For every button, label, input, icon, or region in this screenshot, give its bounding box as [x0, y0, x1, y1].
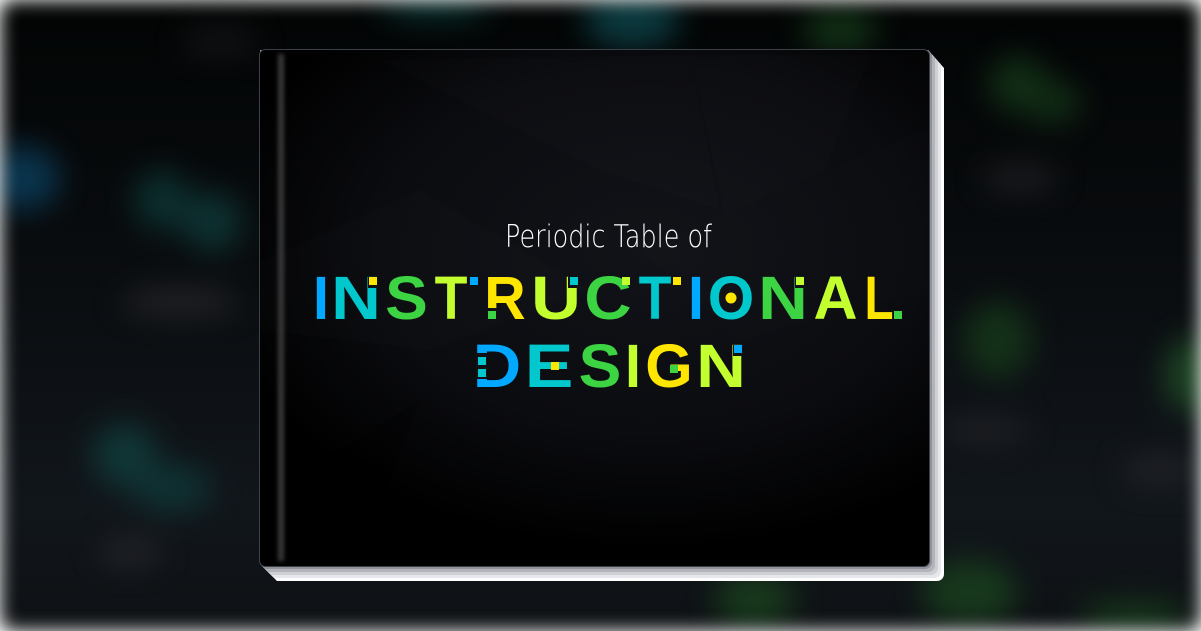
title line: INSTRUCTIONAL: T [435, 265, 467, 333]
title line: DESIGN: D [473, 332, 521, 400]
title line: INSTRUCTIONAL: L [864, 263, 894, 332]
title line: DESIGN: N [696, 332, 746, 400]
title line: DESIGN: I [625, 331, 641, 400]
title line: INSTRUCTIONAL: O [708, 263, 754, 332]
title line: INSTRUCTIONAL: R [484, 263, 526, 332]
title line: INSTRUCTIONAL: T [639, 265, 671, 333]
book pages [250, 40, 944, 581]
title line: INSTRUCTIONAL: N [331, 264, 381, 332]
book cover [260, 50, 930, 566]
title line: INSTRUCTIONAL: N [758, 264, 808, 332]
book [250, 40, 944, 581]
title line: INSTRUCTIONAL: C [584, 265, 632, 333]
title line: DESIGN: E [525, 333, 573, 401]
title line: INSTRUCTIONAL: S [385, 264, 428, 333]
title line: INSTRUCTIONAL: I [313, 263, 329, 332]
title line: INSTRUCTIONAL: U [531, 264, 581, 332]
title line: INSTRUCTIONAL: A [813, 264, 858, 332]
title line: DESIGN: S [579, 332, 621, 401]
subtitle: Periodic Table of [505, 219, 712, 255]
title line: DESIGN [473, 331, 746, 401]
book spine groove [278, 54, 284, 561]
title line: INSTRUCTIONAL [313, 263, 902, 333]
title line: INSTRUCTIONAL: I [688, 263, 704, 332]
title line: DESIGN: G [645, 332, 693, 400]
